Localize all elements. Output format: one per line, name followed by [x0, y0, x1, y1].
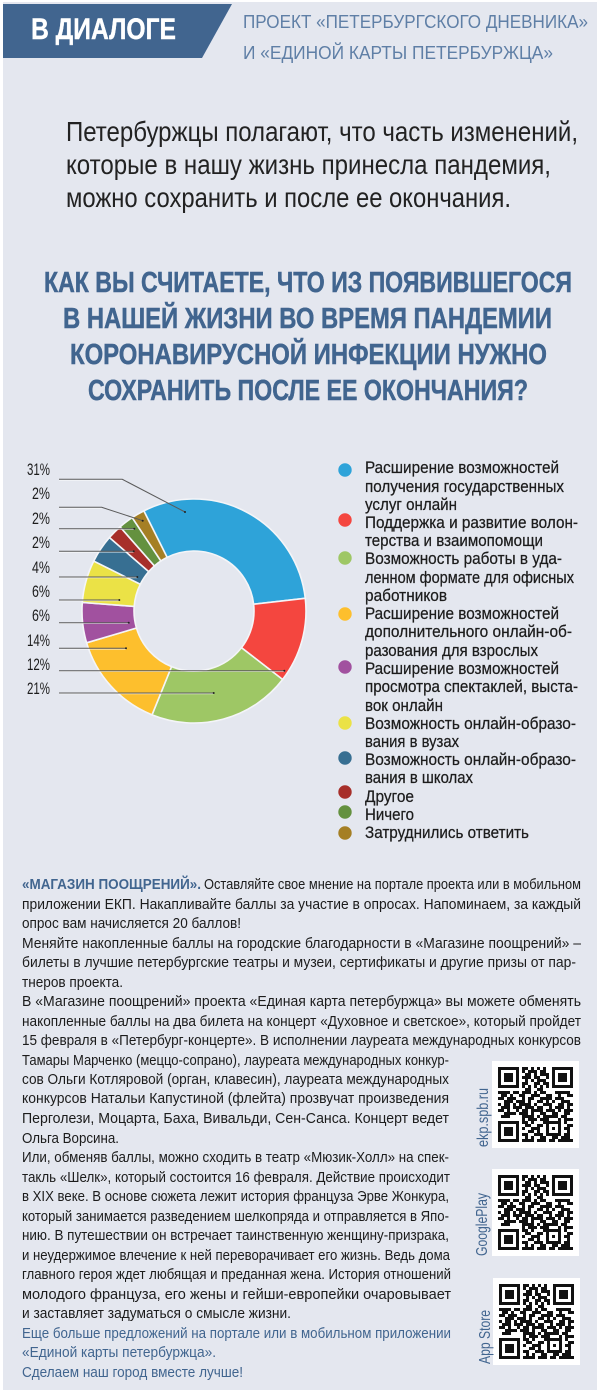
legend item: university online education: вания в вузах [365, 732, 459, 751]
slice: 4% school online education [94, 538, 149, 584]
header banner: В ДИАЛОГЕ [31, 13, 176, 46]
body text: rewards shop: конкурсов Натальи Капустиной (флейта) прозвучат произведения [22, 1090, 449, 1107]
body text: rewards shop: который занимается разведением шелкопряда и отправляется в Япо- [22, 1208, 449, 1225]
QR code: App Store: App Store [477, 1310, 494, 1364]
slice: 2% other [109, 527, 154, 572]
percent labels [27, 460, 50, 698]
legend [338, 458, 578, 842]
QR code: GooglePlay [474, 1169, 579, 1256]
body text: rewards shop: молодого француза, его жены и гейши-европейки очаровывает [22, 1286, 451, 1303]
legend item: volunteering: Поддержка и развитие волон- [365, 513, 578, 532]
body text: rewards shop: Тамары Марченко (меццо-сопрано), лауреата международных конкур- [22, 1052, 449, 1069]
percent labels: 2% [32, 533, 50, 552]
legend item: volunteering [338, 513, 578, 550]
legend item: university online education [338, 714, 576, 751]
percent labels: 21% [27, 679, 50, 698]
legend item: other: Другое [365, 787, 414, 806]
body text: rewards shop [22, 875, 581, 1322]
legend item: theatre and exhibitions online [338, 659, 578, 715]
legend item: adult online education: дополнительного онлайн-об- [365, 622, 572, 641]
closing call to action: «Единой карты петербуржца». [22, 1344, 216, 1361]
body text: rewards shop: такль «Шелк», который состоится 16 февраля. Действие происходит [22, 1169, 450, 1186]
percent labels: 31% [27, 460, 50, 479]
closing call to action [22, 1325, 451, 1381]
legend item: online public services: Расширение возможностей [365, 458, 559, 477]
legend item: remote work: работников [365, 586, 447, 605]
QR code: GooglePlay: GooglePlay [474, 1193, 491, 1256]
slice: 6% theatre and exhibitions online [82, 602, 136, 643]
body text: rewards shop: в XIX веке. В основе сюжета лежит история француза Эрве Жонкура, [22, 1188, 449, 1205]
slice: 14% adult online education [87, 628, 172, 715]
closing call to action: Еще больше предложений на портале или в мобильном приложении [22, 1325, 451, 1342]
QR code: App Store [477, 1278, 580, 1365]
percent labels: 6% [32, 606, 50, 625]
slice: 12% volunteering [241, 598, 306, 679]
legend item: volunteering: терства и взаимопомощи [365, 531, 543, 550]
percent labels: 12% [27, 655, 50, 674]
percent labels: 14% [27, 631, 50, 650]
percent labels: 2% [32, 509, 50, 528]
body text: rewards shop: и неудержимое влечение к ней переворачивает его жизнь. Ведь дома [22, 1247, 450, 1264]
legend item: online public services: услуг онлайн [365, 495, 457, 514]
header project title: ПРОЕКТ «ПЕТЕРБУРГСКОГО ДНЕВНИКА» [243, 12, 588, 32]
legend item: theatre and exhibitions online: просмотра спектаклей, выста- [365, 677, 578, 696]
leader lines [59, 479, 285, 694]
body text: rewards shop: тнеров проекта. [22, 974, 123, 991]
legend item: other [338, 785, 414, 806]
legend item: nothing: Ничего [365, 805, 414, 824]
QR code: ekp.spb.ru: ekp.spb.ru [475, 1088, 492, 1147]
percent labels: 6% [32, 582, 50, 601]
body text: rewards shop: опрос вам начисляется 20 баллов! [22, 915, 241, 932]
intro text: можно сохранить и после ее окончания. [66, 182, 511, 213]
intro text [66, 116, 578, 213]
body text: rewards shop: нию. В путешествии он встречает таинственную женщину-призрака, [22, 1227, 449, 1244]
header project title: И «ЕДИНОЙ КАРТЫ ПЕТЕРБУРЖЦА» [243, 42, 553, 63]
legend item: theatre and exhibitions online: Расширение возможностей [365, 659, 559, 678]
slice: 21% remote work [152, 648, 283, 723]
legend item: adult online education: разования для взрослых [365, 641, 538, 660]
legend item: nothing [338, 805, 414, 824]
body text: rewards shop: «МАГАЗИН ПООЩРЕНИЙ». [22, 875, 201, 893]
survey question heading [44, 267, 572, 407]
legend item: university online education: Возможность онлайн-образо- [365, 714, 576, 733]
QR code: ekp.spb.ru [475, 1061, 579, 1148]
legend item: online public services [338, 458, 564, 514]
header project title [243, 12, 588, 63]
legend item: remote work: Возможность работы в уда- [365, 549, 562, 568]
legend item: online public services: получения государственных [365, 477, 564, 496]
body text: rewards shop: сов Ольги Котляровой (орган, клавесин), лауреата международных [22, 1071, 449, 1088]
legend item: school online education: Возможность онлайн-образо- [365, 750, 576, 769]
body text: rewards shop: Перголези, Моцарта, Баха, Вивальди, Сен-Санса. Концерт ведет [22, 1110, 449, 1127]
slice: 31% online public services [144, 499, 305, 604]
slice: 6% university online education [82, 561, 140, 606]
legend item: adult online education: Расширение возможностей [365, 604, 559, 623]
legend item: remote work [338, 549, 574, 605]
percent labels: 2% [32, 484, 50, 503]
legend item: school online education: вания в школах [365, 768, 473, 787]
header banner [3, 4, 232, 58]
percent labels: 4% [32, 558, 50, 577]
legend item: theatre and exhibitions online: вок онлайн [365, 696, 443, 715]
donut chart [82, 499, 306, 723]
body text: rewards shop: Или, обменяв баллы, можно сходить в театр «Мюзик-Холл» на спек- [22, 1149, 449, 1166]
legend item: school online education [338, 750, 576, 787]
body text: rewards shop: главного героя ждет любящая и преданная жена. История отношений [22, 1266, 451, 1283]
legend item: adult online education [338, 604, 572, 660]
legend item: undecided: Затруднились ответить [365, 823, 529, 842]
body text: rewards shop: Ольга Ворсина. [22, 1130, 119, 1147]
slice: 2% nothing [120, 518, 161, 566]
body text: rewards shop: и заставляет задуматься о смысле жизни. [22, 1305, 291, 1322]
slice: 2% undecided [132, 511, 167, 561]
closing call to action: Сделаем наш город вместе лучше! [22, 1364, 243, 1381]
